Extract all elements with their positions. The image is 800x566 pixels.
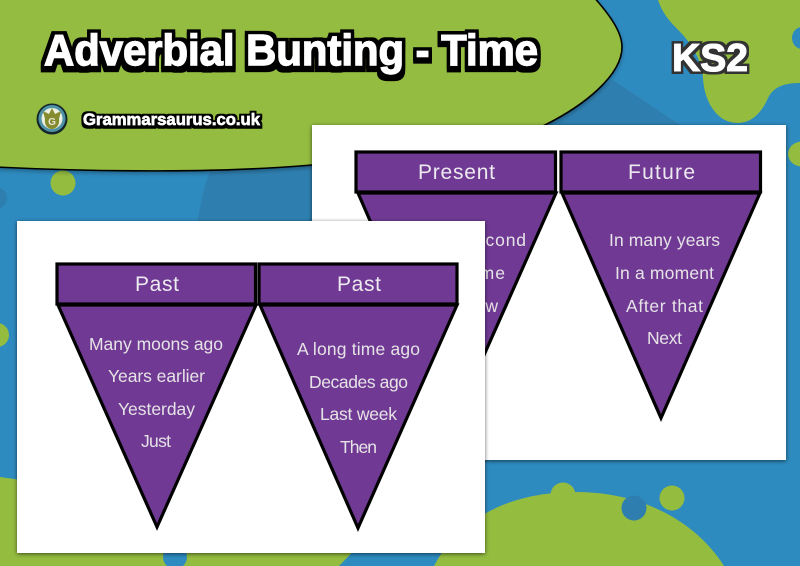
panel: back card: [312, 125, 786, 460]
bunting flag: Future: After that: [626, 296, 703, 316]
title: Adverbial Bunting - Time: [44, 26, 538, 75]
bunting flag: Past right: A long time ago: [297, 339, 420, 359]
bunting flag: Present: Right now: [414, 296, 498, 316]
panel: front card: [17, 221, 485, 553]
bunting flag: Past left: Yesterday: [118, 399, 195, 419]
bunting flag: Present: At this time: [407, 263, 505, 283]
bunting flag: Past left: Years earlier: [108, 366, 205, 386]
header blob: [0, 0, 622, 171]
bunting flag: Present: In a split second: [386, 230, 526, 250]
bunting flag: Past left: Many moons ago: [89, 334, 223, 354]
bunting flag: Past right: Then: [340, 437, 377, 457]
bunting flag: Past right: Decades ago: [309, 372, 408, 392]
website link: Grammarsaurus.co.uk: [83, 110, 261, 129]
bunting flag: Past right: Last week: [320, 404, 397, 424]
icon: Grammarsaurus logo: G: [48, 117, 56, 128]
KS2 badge: KS2: [672, 37, 748, 80]
bunting flag: Past left: Past: [135, 273, 179, 296]
bunting flag: Past left: Just: [141, 431, 171, 451]
bunting flag: Present: [356, 152, 556, 418]
bunting flag: Future: Next: [647, 328, 682, 348]
bunting flag: Present: Present: [418, 161, 495, 184]
bunting flag: Past right: [259, 264, 457, 528]
bunting flag: Past left: [57, 264, 256, 527]
bunting flag: Future: [561, 152, 760, 418]
bunting flag: Past right: Past: [337, 273, 381, 296]
icon: Grammarsaurus logo: [36, 104, 68, 134]
bunting flag: Future: In many years: [609, 230, 720, 250]
bunting flag: Future: Future: [628, 161, 695, 184]
bunting flag: Future: In a moment: [615, 263, 714, 283]
